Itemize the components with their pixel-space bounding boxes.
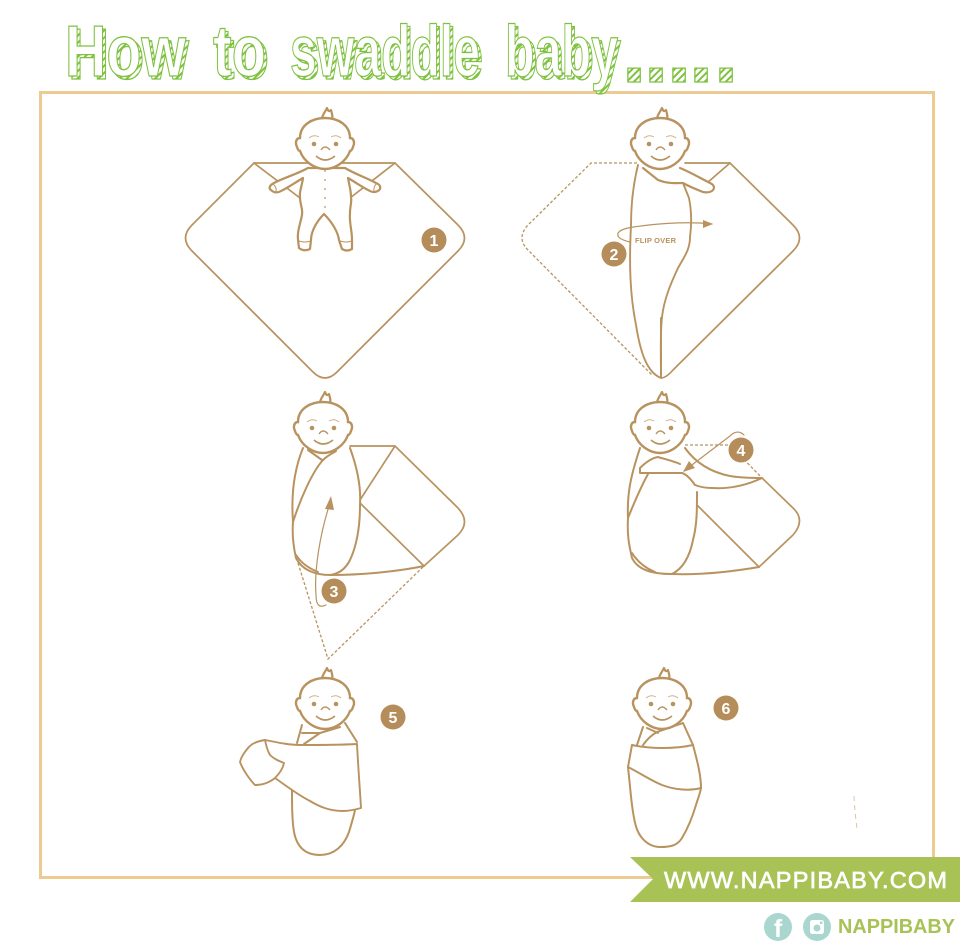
title: baby xyxy=(508,15,621,95)
step number 1 xyxy=(422,228,446,252)
website banner: WWW.NAPPIBABY.COM xyxy=(664,867,947,893)
title: to xyxy=(213,12,266,92)
step 3: fold bottom up xyxy=(292,392,464,659)
title: swaddle xyxy=(290,12,480,92)
step 4: fold right corner across xyxy=(628,392,800,574)
title: baby xyxy=(505,12,618,92)
title: to xyxy=(216,15,269,95)
step number 4 xyxy=(728,438,754,462)
step 1: baby on blanket xyxy=(186,108,464,378)
step 6: swaddled baby xyxy=(628,668,738,847)
flip over label: FLIP OVER xyxy=(635,236,677,245)
title xyxy=(65,0,744,110)
step number 4: 4 xyxy=(737,443,746,460)
icon: facebook xyxy=(764,913,792,941)
step number 6 xyxy=(714,696,738,720)
step number 1: 1 xyxy=(430,233,439,250)
icon: instagram xyxy=(803,913,831,941)
title: swaddle xyxy=(293,15,483,95)
step number 3: 3 xyxy=(330,584,339,601)
step 2: flip over xyxy=(522,108,800,378)
step number 6: 6 xyxy=(722,701,731,718)
outer frame xyxy=(40,92,934,878)
step number 2: 2 xyxy=(610,247,619,264)
step 5: wrap around xyxy=(240,668,406,855)
website banner xyxy=(630,857,960,902)
step number 2 xyxy=(602,242,626,266)
step number 3 xyxy=(322,578,346,604)
title: How xyxy=(65,12,187,92)
title: How xyxy=(68,15,190,95)
step number 5: 5 xyxy=(389,710,398,727)
step number 5 xyxy=(380,704,406,730)
social handle: NAPPIBABY xyxy=(838,916,956,938)
